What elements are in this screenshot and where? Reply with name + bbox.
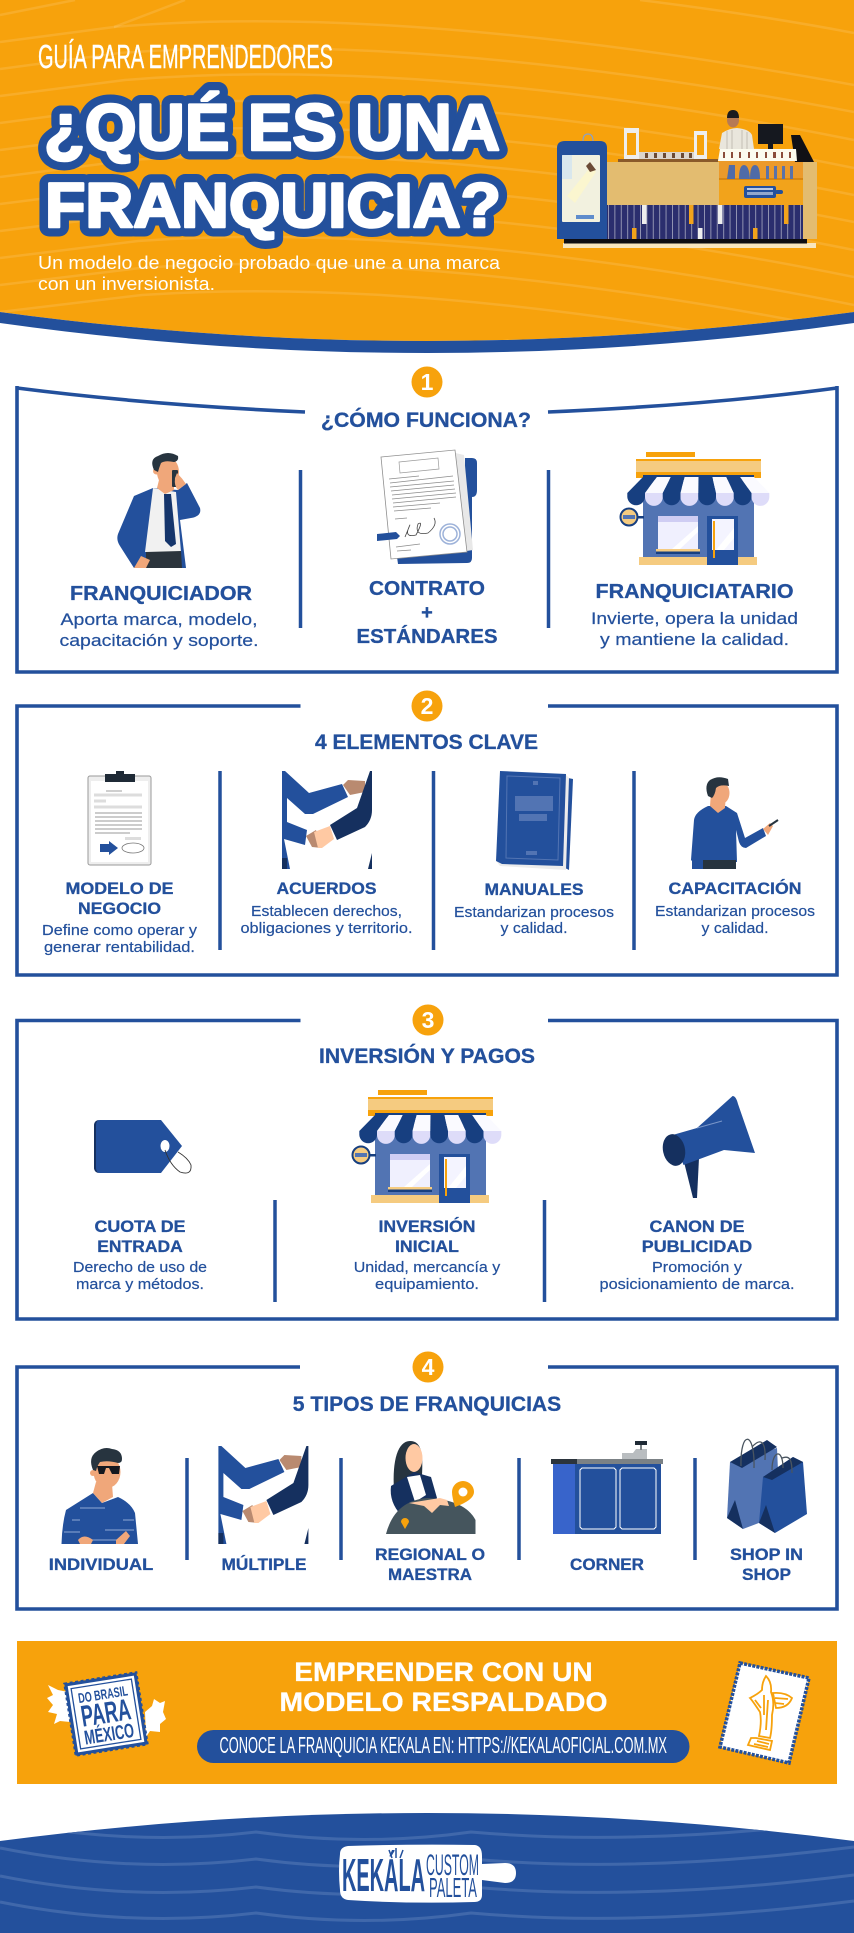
heading: 5 TIPOS DE FRANQUICIAS [293,1393,561,1416]
panel frame [17,1367,837,1609]
step badge 3 [412,1004,444,1036]
column: canon de publicidad: PUBLICIDAD [642,1238,752,1256]
label: shop in shop: SHOP [742,1566,791,1584]
title: ¿QUÉ ES UNA [44,90,500,164]
banner heading: MODELO RESPALDADO [280,1687,608,1717]
icon: man with sunglasses [62,1448,138,1544]
column: contrato y estándares [356,578,498,648]
label: individual: INDIVIDUAL [49,1556,153,1574]
column: cuota de entrada: marca y métodos. [76,1276,204,1293]
column: modelo de negocio: generar rentabilidad. [44,939,195,956]
title: FRANQUICIA? [45,171,501,241]
stamp: do brasil para méxico: PARA [79,1693,133,1734]
column: acuerdos [240,880,412,937]
footer background [0,1813,854,1933]
step badge 4: 4 [422,1354,435,1380]
banner heading [280,1657,608,1717]
column: franquiciatario [591,581,798,649]
icon: handshake [282,771,372,869]
label: shop in shop: SHOP IN [730,1546,803,1564]
stamp: do brasil para méxico: DO BRASIL [77,1682,129,1706]
column: contrato y estándares: CONTRATO [369,578,485,600]
column: inversión inicial: equipamiento. [375,1276,479,1293]
column: inversión inicial: INVERSIÓN [378,1217,476,1236]
banner background [17,1641,837,1784]
label: corner: CORNER [570,1556,644,1574]
icon: megaphone [660,1096,755,1198]
stamp: do brasil para méxico [47,1672,166,1756]
icon: shopping bags [727,1439,807,1533]
column: cuota de entrada [73,1218,207,1293]
column: canon de publicidad: Promoción y [652,1259,743,1276]
link pill [197,1730,690,1763]
panel: cómo funciona [17,366,837,672]
icon: contract [377,450,477,564]
column: canon de publicidad [600,1218,794,1293]
column: acuerdos: obligaciones y territorio. [240,920,412,937]
logo: kekála custom paleta: KEKÁLA [342,1849,425,1901]
column: inversión inicial [354,1217,501,1293]
panel frame [17,386,837,672]
column: contrato y estándares: + [421,602,433,624]
icon: trainer [691,777,778,869]
label: regional o maestra: REGIONAL O [375,1546,485,1564]
heading: INVERSIÓN Y PAGOS [319,1044,535,1068]
column: modelo de negocio: Define como operar y [42,922,198,939]
column: modelo de negocio: MODELO DE [66,880,174,898]
column: manuales: y calidad. [500,920,568,937]
title: FRANQUICIA? [45,171,501,241]
column: capacitación [655,879,815,937]
icon: corner counter [551,1441,663,1534]
column: cuota de entrada: Derecho de uso de [73,1259,207,1276]
stamp: do brasil para méxico: MÉXICO [83,1719,136,1750]
header background [0,0,854,341]
icon: storefront [620,452,769,565]
column: modelo de negocio [42,880,198,956]
column: acuerdos: ACUERDOS [276,880,376,898]
step badge 2: 2 [421,693,433,719]
heading: ¿CÓMO FUNCIONA? [321,408,531,432]
stamp: winged statue [720,1663,809,1763]
dividers [187,1458,695,1560]
column: modelo de negocio: NEGOCIO [78,900,161,918]
column: manuales [454,881,614,937]
subtitle: Un modelo de negocio probado que une a una marca [38,253,501,273]
title [44,90,501,241]
column: franquiciador: Aporta marca, modelo, [60,610,258,629]
dividers [275,1200,544,1302]
column: capacitación: Estandarizan procesos [655,903,815,920]
column: capacitación: CAPACITACIÓN [668,879,802,898]
step badge 4 [412,1352,444,1382]
label: shop in shop [730,1546,803,1584]
step badge 1: 1 [421,369,434,395]
logo: kekála custom paleta: CUSTOM [426,1849,479,1882]
dividers [300,470,548,628]
column: franquiciador: FRANQUICIADOR [70,583,253,605]
column: franquiciador [60,583,258,650]
banner heading: EMPRENDER CON UN [294,1657,593,1687]
column: inversión inicial: INICIAL [395,1238,459,1256]
column: canon de publicidad: CANON DE [650,1218,744,1236]
column: contrato y estándares: ESTÁNDARES [356,625,498,648]
step badge 2 [412,690,442,722]
icon: handshake [218,1446,308,1544]
panel: inversión y pagos [17,1004,837,1319]
icon: businessman on phone [117,453,200,568]
title: ¿QUÉ ES UNA [44,90,500,164]
icon: price tag [94,1120,191,1173]
panel frame [17,1020,837,1319]
step badge 1 [412,366,442,398]
footer [0,1813,854,1933]
column: franquiciatario: Invierte, opera la unidad [591,609,798,628]
header banner [0,0,854,360]
column: inversión inicial: Unidad, mercancía y [354,1259,501,1276]
icon: kiosk [557,110,817,248]
column: franquiciador: capacitación y soporte. [60,631,258,650]
column: cuota de entrada: ENTRADA [97,1238,183,1256]
blue arc [0,312,854,353]
label: múltiple: MÚLTIPLE [222,1555,306,1574]
subtitle [38,253,501,294]
column: franquiciatario: y mantiene la calidad. [600,630,789,649]
column: acuerdos: Establecen derechos, [251,903,402,920]
heading: 4 ELEMENTOS CLAVE [315,731,538,754]
panel frame [17,706,837,975]
column: capacitación: y calidad. [702,920,768,937]
icon: storefront [352,1090,501,1203]
icon: woman with globe [386,1441,476,1534]
icon: clipboard [88,771,151,865]
dividers [220,771,634,950]
column: franquiciatario: FRANQUICIATARIO [596,581,794,603]
callout banner [17,1641,837,1784]
panel: 5 tipos de franquicias [17,1352,837,1609]
label: regional o maestra: MAESTRA [388,1566,472,1584]
kicker: guía para emprendedores: GUÍA PARA EMPRENDEDORES [38,38,333,75]
icon: manual book [496,771,573,870]
column: manuales: MANUALES [484,881,584,899]
panel: 4 elementos clave [17,690,837,975]
label: regional o maestra [375,1546,485,1584]
step badge 3: 3 [422,1007,434,1033]
column: canon de publicidad: posicionamiento de marca. [600,1276,794,1293]
column: manuales: Estandarizan procesos [454,904,614,921]
subtitle: con un inversionista. [38,274,215,294]
logo: kekála custom paleta: PALETA [429,1872,477,1903]
column: cuota de entrada: CUOTA DE [94,1218,186,1236]
